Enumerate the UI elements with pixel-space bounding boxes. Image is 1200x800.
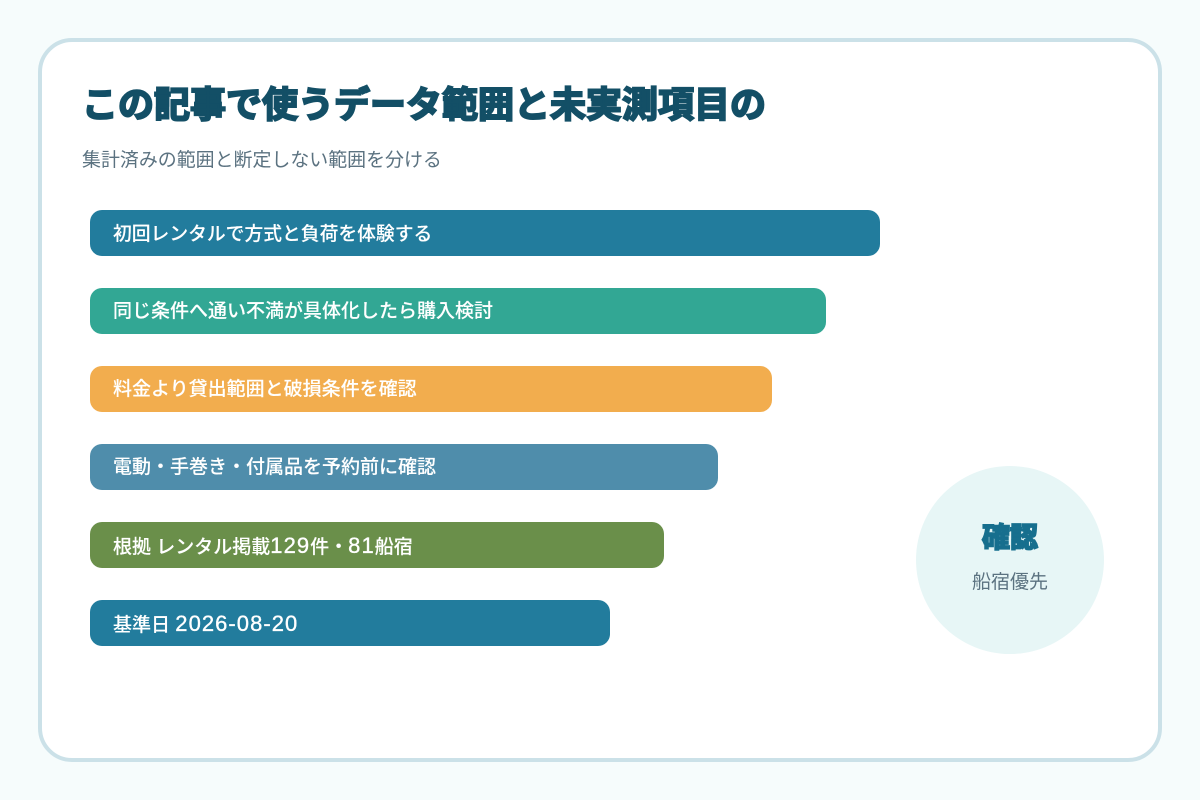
bar 2: 同じ条件へ通い不満が具体化したら購入検討 <box>113 300 493 322</box>
bar 6 <box>90 600 610 646</box>
bar 1: 初回レンタルで方式と負荷を体験する <box>113 222 432 244</box>
bar 5 <box>90 522 664 568</box>
bar 1 <box>90 210 880 256</box>
subtitle: 集計済みの範囲と断定しない範囲を分ける <box>82 150 442 171</box>
bar 4 <box>90 444 718 490</box>
callout circle <box>916 466 1104 654</box>
bar 5: 根拠 レンタル掲載129件・81船宿 <box>113 532 413 558</box>
callout subtext: 船宿優先 <box>972 572 1048 593</box>
title: この記事で使うデータ範囲と未実測項目の <box>82 84 766 125</box>
bar 3: 料金より貸出範囲と破損条件を確認 <box>113 378 417 400</box>
bar 4: 電動・手巻き・付属品を予約前に確認 <box>113 456 436 478</box>
bar 6: 基準日 2026-08-20 <box>113 610 298 636</box>
callout heading: 確認 <box>982 522 1038 553</box>
bar 2 <box>90 288 826 334</box>
bar 3 <box>90 366 772 412</box>
